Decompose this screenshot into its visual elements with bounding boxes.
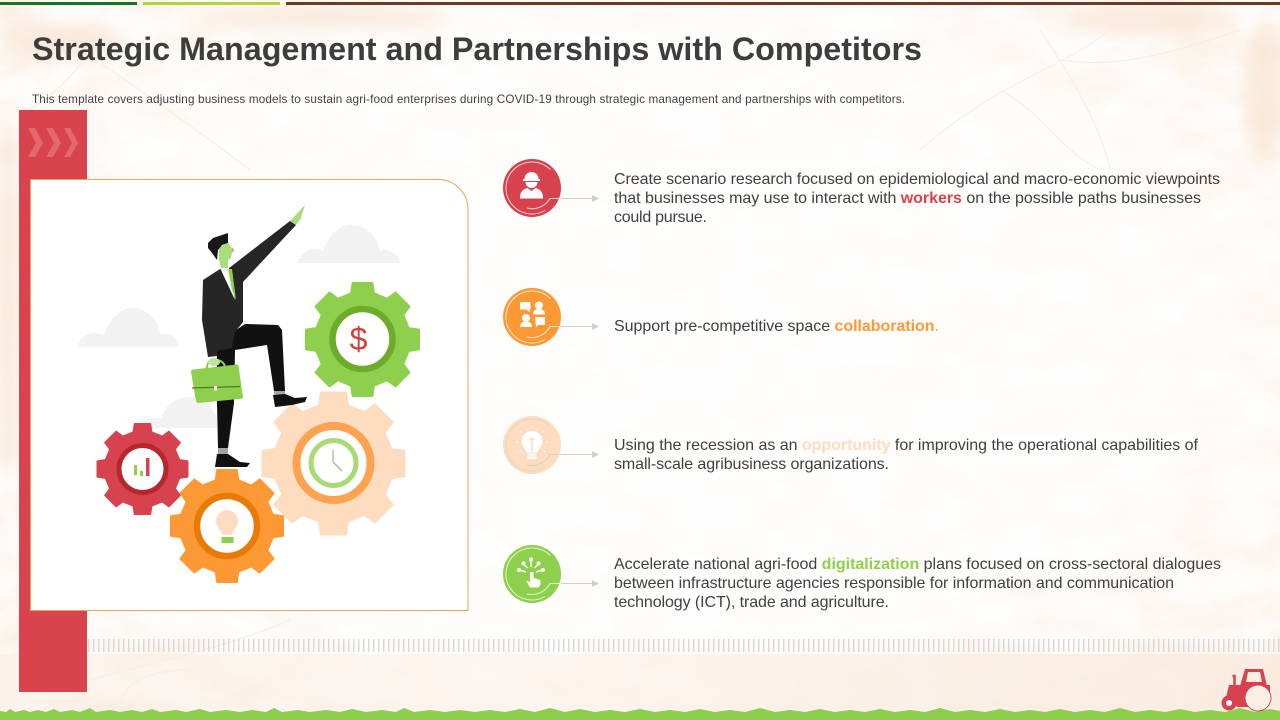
item 4: digitalization — [503, 545, 1221, 611]
text block: between infrastructure agencies responsible for information and communication — [614, 575, 1174, 592]
raised leg — [220, 324, 285, 391]
text block: small-scale agribusiness organizations. — [614, 456, 889, 473]
subtitle: This template covers adjusting business models to sustain agri-food enterprises during COVID-19 through strategic management and partnerships with competitors. — [32, 93, 905, 106]
hatched strip — [88, 639, 1280, 652]
top accent bars — [0, 2, 1280, 5]
briefcase — [207, 360, 225, 368]
text block — [614, 171, 1220, 226]
arrow — [561, 195, 599, 202]
text block — [614, 437, 1199, 473]
item 1: workers — [503, 159, 1220, 226]
icon: touch hand — [503, 545, 561, 603]
title: Strategic Management and Partnerships with Competitors — [32, 31, 922, 67]
gear: green dollar: $ — [350, 321, 368, 357]
text block: Accelerate national agri-food digitalization plans focused on cross-sectoral dialogues — [614, 556, 1221, 573]
head — [219, 243, 234, 268]
grass strip — [0, 708, 1280, 720]
text block: Using the recession as an opportunity for improving the operational capabilities of — [614, 437, 1199, 454]
icon: light bulb — [503, 416, 561, 474]
standing leg — [217, 350, 235, 448]
icon: worker — [503, 159, 561, 217]
text block: Support pre-competitive space collaboration. — [614, 318, 939, 335]
icon: red tractor — [1222, 669, 1272, 712]
item 2: collaboration — [503, 288, 939, 346]
text block: Create scenario research focused on epidemiological and macro-economic viewpoints — [614, 171, 1220, 188]
clouds — [78, 225, 400, 428]
gear: peach clock — [263, 393, 404, 534]
text block: could pursue. — [614, 209, 707, 226]
arrow — [561, 451, 599, 458]
gear: green dollar — [306, 283, 419, 396]
arrow — [561, 323, 599, 330]
chevrons — [28, 128, 78, 157]
gear: red chart — [97, 424, 188, 514]
text block — [614, 556, 1221, 611]
jacket and arm — [202, 221, 296, 357]
gear: orange bulb — [171, 470, 283, 582]
businessman figure — [191, 205, 307, 467]
arrow — [561, 580, 599, 587]
text block: technology (ICT), trade and agriculture. — [614, 594, 889, 611]
item 3: opportunity — [503, 416, 1199, 474]
text block: that businesses may use to interact with workers on the possible paths businesses — [614, 190, 1201, 207]
red side bar — [19, 110, 87, 692]
icon: people talking — [503, 288, 561, 346]
illustration panel — [30, 180, 468, 610]
